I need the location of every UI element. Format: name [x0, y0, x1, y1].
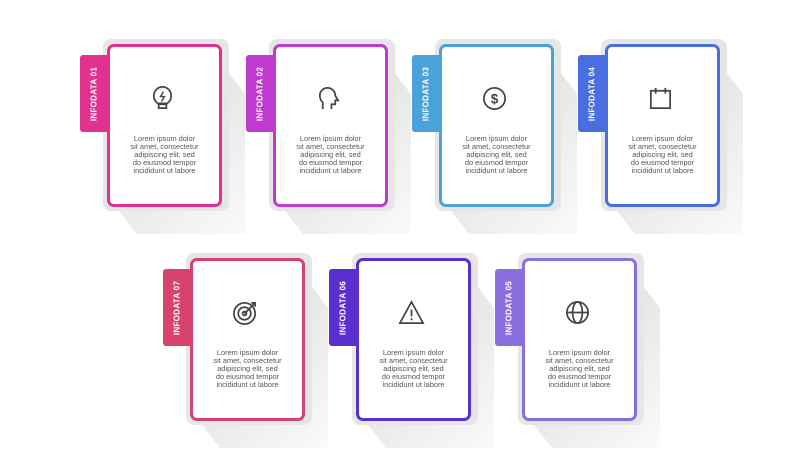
text 07: do eiusmod tempor [216, 372, 279, 381]
text 05: Lorem ipsum dolor [549, 348, 610, 357]
tab 03 [412, 55, 439, 132]
text 02: do eiusmod tempor [299, 158, 362, 167]
tab 01: INFODATA 01 [89, 66, 98, 121]
card 01 [80, 39, 245, 234]
tab 07 [163, 269, 190, 346]
text 04 [628, 134, 697, 175]
text 02: sit amet, consectetur [296, 142, 365, 151]
text 02: Lorem ipsum dolor [300, 134, 361, 143]
text 03: sit amet, consectetur [462, 142, 531, 151]
text 05 [545, 348, 614, 389]
card 05 [495, 253, 660, 448]
text 01: do eiusmod tempor [133, 158, 196, 167]
tab 06 [329, 269, 356, 346]
text 07 [213, 348, 282, 389]
text 06: sit amet, consectetur [379, 356, 448, 365]
tab 05: INFODATA 05 [504, 280, 513, 335]
text 07: adipiscing elit, sed [217, 364, 278, 373]
text 01 [130, 134, 199, 175]
text 06 [379, 348, 448, 389]
tab 04 [578, 55, 605, 132]
tab 02 [246, 55, 273, 132]
tab 04: INFODATA 04 [587, 66, 596, 121]
tab 03: INFODATA 03 [421, 66, 430, 121]
text 04: adipiscing elit, sed [632, 150, 693, 159]
text 03: incididunt ut labore [465, 166, 528, 175]
text 02: adipiscing elit, sed [300, 150, 361, 159]
tab 06: INFODATA 06 [338, 280, 347, 335]
icon: calendar [650, 88, 671, 109]
text 06: incididunt ut labore [382, 380, 445, 389]
text 06: do eiusmod tempor [382, 372, 445, 381]
text 03 [462, 134, 531, 175]
text 07: sit amet, consectetur [213, 356, 282, 365]
icon: dollar: $ [491, 91, 499, 106]
icon: head [318, 87, 340, 110]
text 01: sit amet, consectetur [130, 142, 199, 151]
text 04: sit amet, consectetur [628, 142, 697, 151]
text 02: incididunt ut labore [299, 166, 362, 175]
card 02 [246, 39, 411, 234]
text 01: incididunt ut labore [133, 166, 196, 175]
text 05: adipiscing elit, sed [549, 364, 610, 373]
tab 05 [495, 269, 522, 346]
icon: bulb [152, 86, 172, 109]
text 03: do eiusmod tempor [465, 158, 528, 167]
text 06: adipiscing elit, sed [383, 364, 444, 373]
icon: globe [566, 301, 589, 324]
text 07: Lorem ipsum dolor [217, 348, 278, 357]
text 01: adipiscing elit, sed [134, 150, 195, 159]
tab 07: INFODATA 07 [172, 280, 181, 335]
text 05: sit amet, consectetur [545, 356, 614, 365]
tab 01 [80, 55, 107, 132]
text 05: do eiusmod tempor [548, 372, 611, 381]
text 04: incididunt ut labore [631, 166, 694, 175]
text 02 [296, 134, 365, 175]
card 03 [412, 39, 577, 234]
card 07 [163, 253, 328, 448]
text 03: adipiscing elit, sed [466, 150, 527, 159]
text 05: incididunt ut labore [548, 380, 611, 389]
text 01: Lorem ipsum dolor [134, 134, 195, 143]
icon: warning [398, 300, 424, 324]
icon: target [233, 302, 256, 325]
tab 02: INFODATA 02 [255, 66, 264, 121]
icon: dollar [483, 87, 506, 110]
text 06: Lorem ipsum dolor [383, 348, 444, 357]
text 03: Lorem ipsum dolor [466, 134, 527, 143]
card 06 [329, 253, 494, 448]
text 07: incididunt ut labore [216, 380, 279, 389]
card 04 [578, 39, 743, 234]
text 04: do eiusmod tempor [631, 158, 694, 167]
text 04: Lorem ipsum dolor [632, 134, 693, 143]
